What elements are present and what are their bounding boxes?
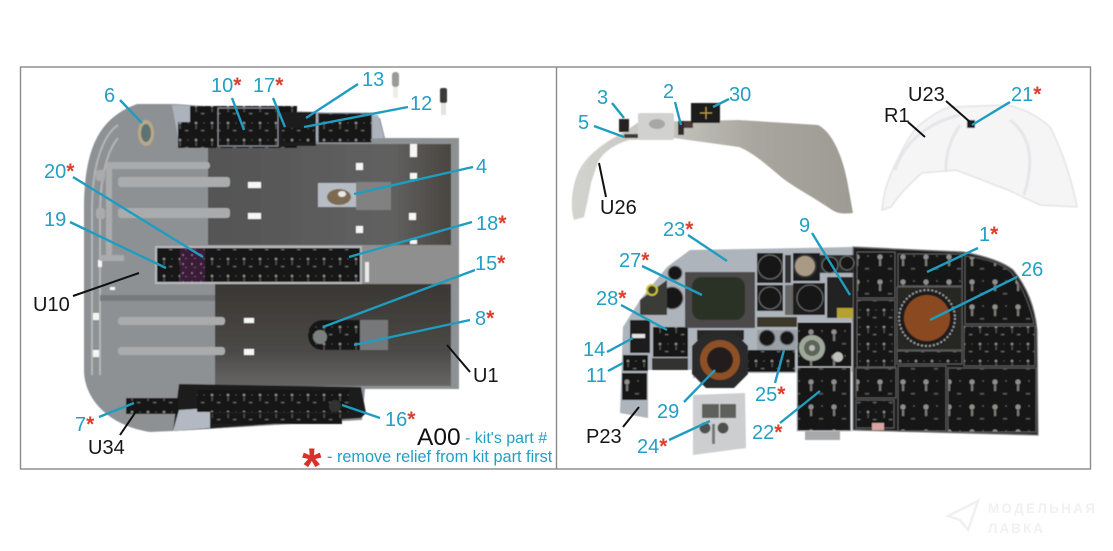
transparent shell bbox=[882, 105, 1077, 210]
label 12 bbox=[304, 93, 432, 127]
label 21: 21* bbox=[1011, 83, 1042, 106]
label 20 bbox=[44, 160, 203, 257]
label 28 bbox=[596, 287, 667, 330]
label U23 bbox=[908, 84, 970, 122]
label 24: 24* bbox=[637, 435, 668, 458]
label 3: 3 bbox=[597, 87, 608, 109]
label 14: 14 bbox=[583, 339, 605, 361]
struts bbox=[895, 115, 1030, 195]
red hatch bbox=[872, 423, 884, 430]
switch areas bbox=[856, 252, 1036, 432]
label 30 bbox=[713, 84, 751, 107]
label 15: 15* bbox=[475, 252, 506, 275]
label 13: 13 bbox=[362, 69, 384, 91]
watermark text bbox=[988, 501, 1095, 536]
bottom console bbox=[173, 384, 366, 431]
console 24 bbox=[693, 393, 746, 455]
label 21 bbox=[972, 83, 1042, 125]
label 26 bbox=[930, 259, 1043, 320]
label 23 bbox=[663, 218, 727, 261]
frame bbox=[20, 67, 1090, 469]
labels: coaming bbox=[578, 81, 751, 219]
label 25: 25* bbox=[755, 383, 786, 406]
label 17 bbox=[253, 74, 285, 127]
watermark text: ЛАВКА bbox=[988, 521, 1043, 536]
left column bbox=[622, 280, 688, 400]
label 14 bbox=[583, 338, 633, 361]
label U34 bbox=[88, 410, 137, 459]
instruments bbox=[661, 253, 854, 372]
label U1 bbox=[447, 345, 499, 387]
port ring 6 bbox=[138, 120, 154, 146]
label 9: 9 bbox=[799, 215, 810, 237]
label 10 bbox=[211, 74, 244, 130]
centre switch panel bbox=[797, 322, 852, 367]
labels: clear part bbox=[884, 83, 1042, 137]
label P23 bbox=[586, 407, 639, 448]
tub shell bbox=[84, 104, 459, 432]
labels: instrument panel bbox=[583, 215, 1043, 458]
label 5: 5 bbox=[578, 112, 589, 134]
sight block bbox=[638, 113, 674, 140]
label 8 bbox=[354, 307, 495, 345]
label 18 bbox=[349, 212, 507, 257]
label 26: 26 bbox=[1021, 259, 1043, 281]
label 23: 23* bbox=[663, 218, 694, 241]
label 8: 8* bbox=[475, 307, 495, 330]
panel: instrument panel bbox=[620, 247, 1038, 455]
label U10: U10 bbox=[33, 294, 70, 316]
pipes bbox=[96, 162, 230, 355]
shell bbox=[572, 120, 853, 220]
label 22: 22* bbox=[752, 421, 783, 444]
part 21 bbox=[967, 120, 975, 128]
panel 7 bbox=[126, 398, 178, 414]
label 16: 16* bbox=[385, 408, 416, 431]
legend bbox=[302, 424, 553, 494]
label 15 bbox=[323, 252, 506, 327]
right dark panel bbox=[853, 247, 1038, 435]
label 1 bbox=[927, 223, 999, 272]
label 20: 20* bbox=[44, 160, 75, 183]
tub rim bbox=[92, 125, 118, 375]
label 7 bbox=[75, 403, 134, 436]
label 7: 7* bbox=[75, 413, 95, 436]
centre grey panel bbox=[620, 247, 853, 418]
label 19 bbox=[44, 209, 166, 268]
label P23: P23 bbox=[586, 426, 622, 448]
label 22 bbox=[752, 391, 820, 444]
dial 29 bbox=[692, 330, 748, 388]
lower floor bbox=[215, 284, 451, 386]
label U26 bbox=[599, 163, 637, 219]
label 2: 2 bbox=[663, 81, 674, 103]
label R1 bbox=[884, 105, 925, 137]
radar dial 26 bbox=[897, 288, 957, 348]
label 16 bbox=[342, 405, 416, 431]
label 29: 29 bbox=[657, 401, 679, 423]
label U34: U34 bbox=[88, 437, 125, 459]
block 4 bbox=[318, 182, 391, 210]
label 9 bbox=[799, 215, 850, 295]
kit part key: - kit's part # bbox=[465, 430, 547, 447]
label 27: 27* bbox=[619, 249, 650, 272]
part 2 bbox=[678, 121, 693, 135]
part 30 bbox=[691, 103, 720, 123]
label 28: 28* bbox=[596, 287, 627, 310]
panel: clear part R1 bbox=[882, 105, 1077, 210]
label 29 bbox=[657, 370, 715, 423]
watermark logo bbox=[948, 501, 978, 530]
label 17: 17* bbox=[253, 74, 284, 97]
label 25 bbox=[755, 350, 786, 406]
label 6: 6 bbox=[104, 85, 115, 107]
label 13 bbox=[306, 69, 384, 118]
label 6 bbox=[104, 85, 142, 123]
floor lights bbox=[93, 144, 417, 357]
label 30: 30 bbox=[729, 84, 751, 106]
small part 13 bbox=[392, 72, 399, 98]
screen 27 bbox=[685, 272, 755, 328]
label 11: 11 bbox=[586, 365, 607, 387]
label U23: U23 bbox=[908, 84, 945, 106]
panel: coaming U26 bbox=[572, 103, 853, 220]
label 12: 12 bbox=[410, 93, 432, 115]
kit part key: A00 bbox=[417, 424, 461, 451]
label 2 bbox=[663, 81, 681, 125]
top console bbox=[172, 105, 384, 148]
label 24 bbox=[637, 421, 710, 458]
relief key: - remove relief from kit part first bbox=[327, 448, 553, 466]
lower centre panel 22 bbox=[797, 367, 851, 440]
label 5 bbox=[578, 112, 624, 137]
middle shelf bbox=[362, 245, 459, 284]
relief key: * bbox=[302, 438, 322, 494]
label 27 bbox=[619, 249, 702, 295]
labels: left panel bbox=[33, 69, 507, 459]
small part 12 bbox=[440, 88, 447, 115]
label 1: 1* bbox=[979, 223, 999, 246]
part 3 bbox=[619, 119, 629, 132]
block 8 and 15 bbox=[308, 320, 388, 350]
label U10 bbox=[33, 273, 139, 316]
label 4: 4 bbox=[476, 156, 487, 178]
watermark text: МОДЕЛЬНАЯ bbox=[988, 501, 1095, 516]
label 11 bbox=[586, 363, 623, 387]
label 19: 19 bbox=[44, 209, 66, 231]
panel: left cockpit tub bbox=[84, 72, 459, 432]
watermark bbox=[948, 501, 1095, 536]
relief key bbox=[302, 438, 553, 494]
label 10: 10* bbox=[211, 74, 242, 97]
label U26: U26 bbox=[600, 197, 637, 219]
part 5 bbox=[624, 134, 638, 138]
label 18: 18* bbox=[476, 212, 507, 235]
upper floor bbox=[208, 144, 451, 245]
label 4 bbox=[354, 156, 487, 194]
label R1: R1 bbox=[884, 105, 910, 127]
kit part key bbox=[417, 424, 547, 451]
middle console bbox=[155, 246, 369, 284]
label 3 bbox=[597, 87, 624, 118]
label U1: U1 bbox=[473, 365, 499, 387]
